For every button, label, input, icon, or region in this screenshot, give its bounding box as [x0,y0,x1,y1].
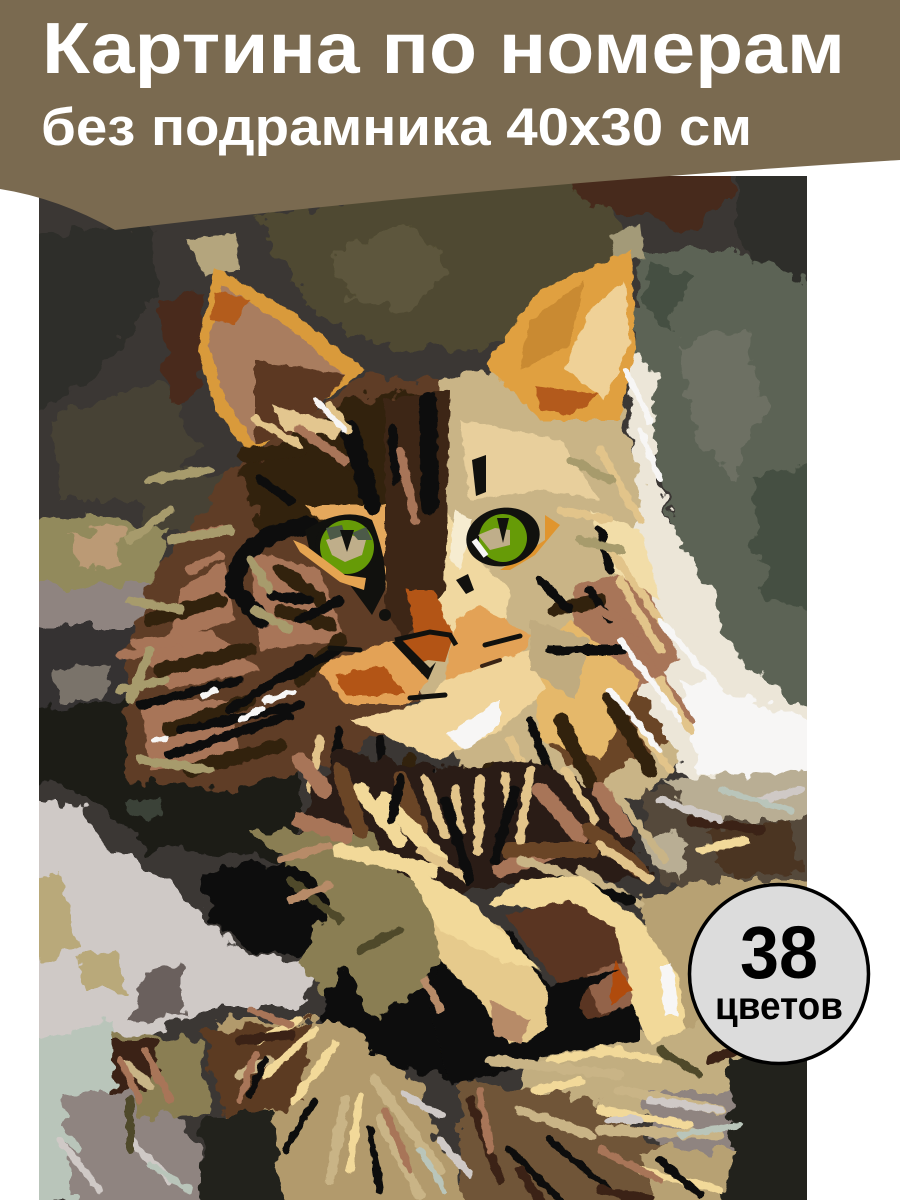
cat fur base [125,340,815,800]
left ear [185,232,365,455]
badge: 38 colours: 38 [740,911,818,994]
header banner [0,0,900,230]
right eye [466,508,560,570]
painting background [30,170,815,1200]
face and cheek fur strokes [115,368,724,794]
lower fur strokes [50,790,800,1200]
face patches [130,420,680,770]
title: Картина по номерам [42,9,845,89]
left eye [293,514,385,615]
badge: 38 colours: цветов [715,985,843,1028]
badge: 38 colours [690,884,868,1064]
subtitle: без подрамника 40х30 см [41,98,752,157]
painting: cat portrait [30,170,815,1200]
chest, arm and body [110,750,815,1200]
face markings [305,390,590,760]
right ear [485,225,645,420]
cat paws [400,860,685,1085]
nose and mouth [330,455,520,698]
chest fur streaks [300,760,665,905]
